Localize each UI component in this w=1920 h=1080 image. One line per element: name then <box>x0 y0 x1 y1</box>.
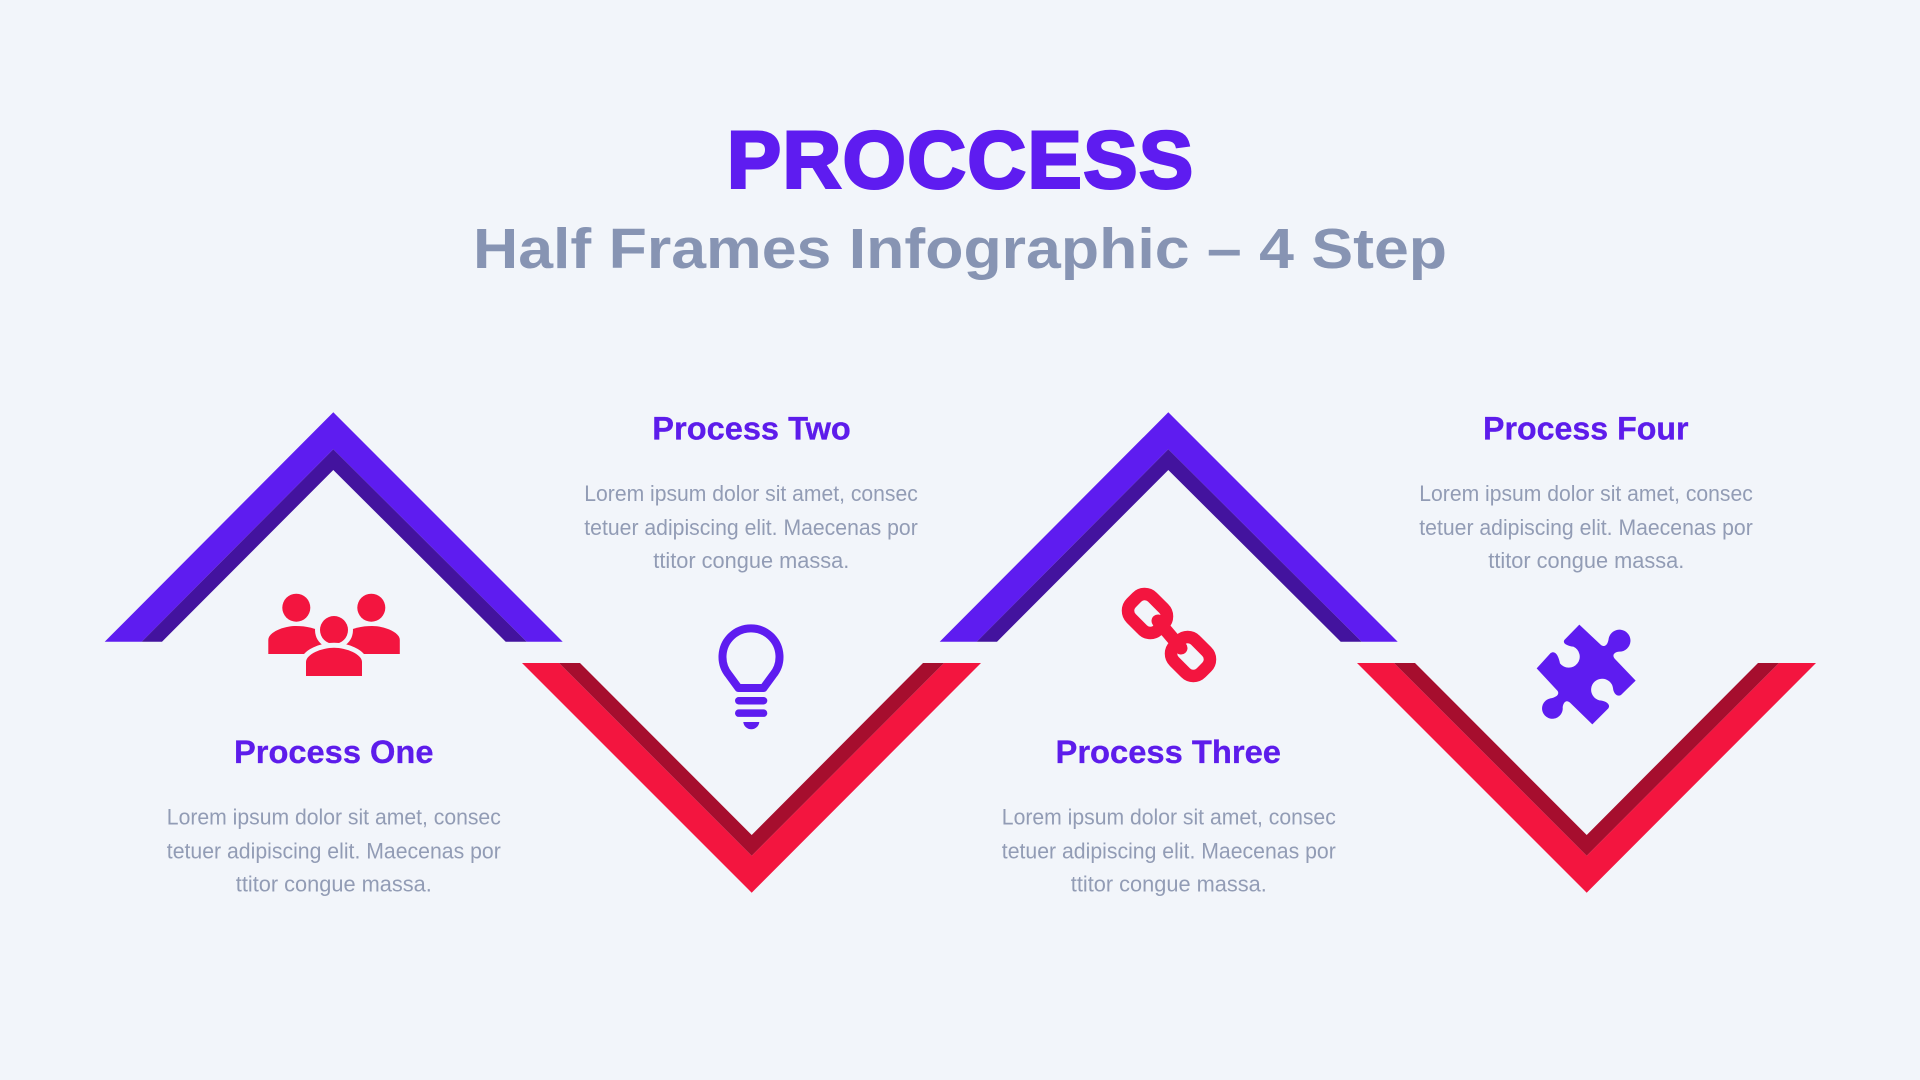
icon: puzzle piece <box>1537 625 1636 724</box>
text: process one body: Lorem ipsum dolor sit amet, consec <box>167 804 501 830</box>
text: process four body <box>1419 481 1753 573</box>
text: process two body: Lorem ipsum dolor sit amet, consec <box>584 481 918 506</box>
text: process three body: Lorem ipsum dolor sit amet, consec <box>1002 804 1336 830</box>
icon: light bulb <box>723 628 780 729</box>
heading: process three: Process Three <box>1056 734 1281 770</box>
text: process four body: ttitor congue massa. <box>1488 548 1684 573</box>
text: process two body: tetuer adipiscing elit. Maecenas por <box>584 515 918 540</box>
text: process one body <box>167 804 501 896</box>
text: process three body: ttitor congue massa. <box>1071 872 1267 896</box>
text: process four body: tetuer adipiscing elit. Maecenas por <box>1419 515 1753 540</box>
panel: step four <box>1357 410 1816 893</box>
text: process three body <box>1002 804 1336 896</box>
text: process two body <box>584 481 918 573</box>
text: process two body: ttitor congue massa. <box>653 548 849 573</box>
roof frame three <box>940 412 1398 642</box>
heading: process two: Process Two <box>652 410 851 446</box>
panel: step two <box>522 410 981 893</box>
roof frame one <box>105 412 563 642</box>
chevron frame two <box>522 663 981 893</box>
text: process one body: tetuer adipiscing elit. Maecenas por <box>167 838 501 864</box>
heading: process four: Process Four <box>1483 410 1688 446</box>
heading: process one: Process One <box>234 734 434 770</box>
text: process four body: Lorem ipsum dolor sit amet, consec <box>1419 481 1753 506</box>
icon: chain link <box>1123 589 1215 681</box>
text: process three body: tetuer adipiscing elit. Maecenas por <box>1002 838 1336 864</box>
chevron frame four <box>1357 663 1816 893</box>
panel: step three <box>940 412 1398 896</box>
title: PROCCESS <box>727 116 1193 206</box>
text: process one body: ttitor congue massa. <box>236 872 432 896</box>
icon: people <box>268 594 400 676</box>
panel: step one <box>105 412 563 896</box>
subtitle: Half Frames Infographic – 4 Step <box>473 217 1447 281</box>
